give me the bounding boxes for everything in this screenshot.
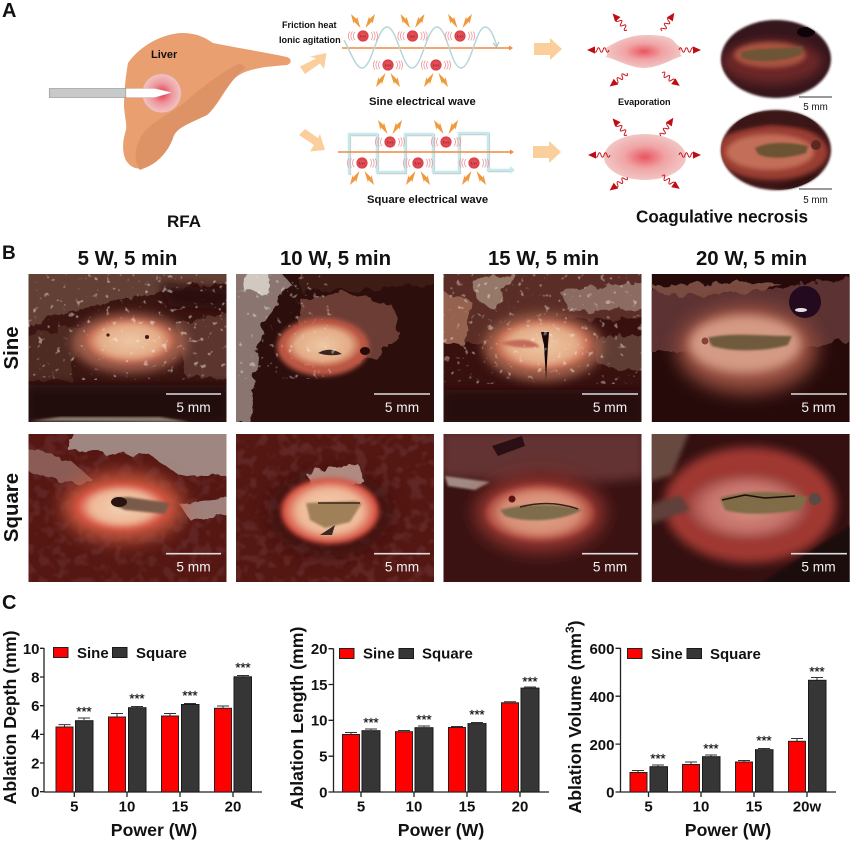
- sine ions: Ion: [385, 62, 391, 68]
- square ions: Ion: [415, 160, 421, 166]
- x tick labels: 10: [119, 798, 135, 816]
- photo: sine 5 W: [28, 274, 226, 422]
- y tick labels: 400: [589, 689, 614, 706]
- oval photo: square necrosis: [716, 110, 835, 206]
- legend: Sine: [651, 646, 683, 663]
- legend: [340, 646, 473, 662]
- y tick labels: 10: [23, 641, 40, 658]
- y tick labels: [311, 641, 328, 802]
- ablation zone: [142, 74, 181, 113]
- row label Square: Square: [1, 473, 23, 542]
- significance stars: ***: [650, 751, 666, 766]
- x tick labels: 15: [459, 798, 475, 816]
- column heading 15 W: 15 W, 5 min: [488, 248, 599, 270]
- photo: square 10 W: 5 mm: [385, 560, 419, 574]
- legend: Square: [422, 646, 473, 662]
- photo: sine 20 W: 5 mm: [801, 400, 836, 415]
- sine wave diagram: [342, 14, 513, 108]
- y tick labels: 0: [606, 784, 614, 802]
- y axis title: 3: [563, 626, 577, 633]
- square ions: Ion: [443, 140, 449, 144]
- panel label B: B: [2, 243, 16, 264]
- x tick labels: 10: [406, 798, 422, 816]
- significance stars: [363, 674, 538, 730]
- panel label A: A: [2, 0, 16, 22]
- scale bar: [374, 393, 430, 395]
- significance stars: ***: [235, 660, 251, 675]
- x tick labels: 15: [172, 798, 188, 816]
- row label Sine: Sine: [1, 326, 23, 370]
- y axis title: Ablation Length (mm): [287, 627, 307, 809]
- photo: square 5 W: 5 mm: [176, 560, 211, 574]
- square ions: Ion: [471, 160, 477, 166]
- photo: square 15 W: 5 mm: [593, 560, 627, 574]
- x tick labels: 20: [512, 798, 528, 816]
- scale bar: [799, 188, 832, 190]
- text: sine electrical wave: Sine electrical wave: [369, 96, 476, 108]
- column heading 5 W: 5 W, 5 min: [78, 248, 177, 270]
- arrow: square to necrosis: [533, 141, 561, 163]
- x tick labels: [70, 798, 241, 816]
- photo: sine 15 W: [444, 274, 642, 422]
- legend: [54, 645, 187, 662]
- text: RFA: RFA: [167, 212, 201, 231]
- panel A: RFA liver diagram: [49, 33, 291, 231]
- liver: [123, 33, 291, 170]
- evaporation blob: square: [588, 116, 701, 193]
- oval photo: sine necrosis: 5 mm: [803, 102, 828, 113]
- bars: [630, 678, 826, 792]
- text: square electrical wave: Square electrical wave: [367, 194, 488, 206]
- sine ions: [348, 14, 475, 87]
- photo: square 10 W: [236, 434, 434, 582]
- scale bar: [166, 553, 221, 555]
- y tick labels: 5: [319, 748, 328, 766]
- scale bar: [791, 393, 847, 395]
- text: coagulative necrosis: Coagulative necrosis: [636, 208, 808, 226]
- significance stars: ***: [416, 712, 432, 727]
- text: Liver: Liver: [151, 49, 178, 61]
- text: friction heat label: Friction heat: [282, 20, 337, 30]
- y axis title: Ablation Depth (mm): [0, 630, 20, 804]
- significance stars: [76, 660, 251, 719]
- legend: [628, 646, 761, 663]
- scale bar: [582, 393, 638, 395]
- bar chart: ablation depth: [0, 630, 262, 840]
- bar chart: ablation length: [287, 627, 549, 840]
- significance stars: ***: [809, 664, 825, 679]
- scale bar: [799, 96, 832, 98]
- photo: sine 20 W: [645, 274, 851, 422]
- scale bar: [791, 553, 847, 555]
- photo: square 5 W: [22, 428, 232, 582]
- x axis title: Power (W): [685, 820, 771, 840]
- y tick labels: 10: [311, 712, 328, 730]
- scale bar: [582, 553, 638, 555]
- arrow: sine to evaporation: [534, 38, 562, 60]
- photo: square 20 W: 5 mm: [801, 560, 836, 574]
- x tick labels: 5: [357, 798, 365, 816]
- significance stars: ***: [182, 688, 198, 703]
- scale bar: [374, 553, 430, 555]
- photo: sine 10 W: [236, 274, 434, 422]
- photo: sine 5 W: 5 mm: [176, 400, 211, 415]
- bars: [56, 676, 252, 792]
- y tick labels: 600: [589, 641, 614, 658]
- x tick labels: 10: [693, 798, 709, 816]
- x tick labels: 5: [644, 798, 653, 816]
- square ions: Ion: [387, 140, 393, 144]
- square ions: Ion: [359, 160, 365, 166]
- sine ions: Ion: [433, 62, 439, 68]
- photo: square 15 W: [440, 430, 645, 582]
- y tick labels: 6: [31, 698, 40, 715]
- text: evaporation: Evaporation: [618, 97, 671, 107]
- legend: Square: [710, 646, 761, 663]
- y tick labels: 0: [31, 784, 40, 801]
- significance stars: ***: [76, 704, 92, 719]
- axes: [616, 648, 836, 797]
- y tick labels: 4: [31, 726, 40, 744]
- x axis title: Power (W): [398, 820, 484, 840]
- legend: Square: [136, 645, 187, 662]
- panel label C: C: [2, 592, 16, 614]
- y tick labels: 20: [311, 641, 328, 658]
- y tick labels: [23, 641, 40, 801]
- x tick labels: 20: [225, 798, 241, 816]
- y tick labels: 15: [311, 677, 328, 694]
- x tick labels: 5: [70, 798, 78, 816]
- photo: square 20 W: [648, 430, 851, 584]
- y tick labels: 8: [31, 670, 40, 686]
- y tick labels: [589, 641, 614, 802]
- arrow: liver to square wave: [299, 129, 325, 152]
- y axis title: Ablation Volume (mm: [565, 633, 585, 814]
- sine ions: Ion: [360, 34, 366, 38]
- column heading 10 W: 10 W, 5 min: [280, 248, 391, 270]
- RFA needle: [49, 88, 172, 98]
- legend: Sine: [77, 645, 109, 662]
- sine ions: Ion: [410, 34, 415, 38]
- bars: [342, 687, 539, 792]
- square wave diagram: [338, 120, 515, 206]
- oval photo: square necrosis: 5 mm: [803, 195, 828, 206]
- y tick labels: 0: [319, 784, 328, 802]
- x tick labels: [644, 798, 822, 816]
- axes: [40, 648, 262, 797]
- evaporation blob: sine: [587, 11, 701, 89]
- arrow: liver to sine wave: [300, 53, 326, 74]
- axes: [328, 648, 549, 797]
- significance stars: ***: [129, 691, 145, 706]
- text: ionic agitation label: Ionic agitation: [279, 35, 341, 45]
- significance stars: ***: [756, 733, 772, 748]
- legend: Sine: [363, 646, 395, 662]
- significance stars: ***: [522, 674, 538, 689]
- photo: sine 10 W: 5 mm: [385, 400, 419, 415]
- significance stars: [650, 664, 825, 766]
- scale bar: [166, 393, 221, 395]
- column heading 20 W: 20 W, 5 min: [696, 248, 807, 270]
- x tick labels: 20w: [793, 798, 822, 816]
- x axis title: Power (W): [111, 820, 197, 840]
- bar chart: ablation volume: [563, 620, 836, 840]
- significance stars: ***: [703, 741, 719, 756]
- photo: sine 15 W: 5 mm: [593, 400, 627, 415]
- y tick labels: 2: [31, 756, 40, 772]
- oval photo: sine necrosis: [721, 20, 832, 113]
- x tick labels: [357, 798, 528, 816]
- y tick labels: 200: [589, 737, 614, 754]
- square ions: [347, 120, 489, 185]
- x tick labels: 15: [746, 798, 762, 816]
- significance stars: ***: [363, 715, 379, 730]
- significance stars: ***: [469, 707, 485, 722]
- y axis title: ): [565, 620, 585, 626]
- sine ions: Ion: [457, 34, 463, 38]
